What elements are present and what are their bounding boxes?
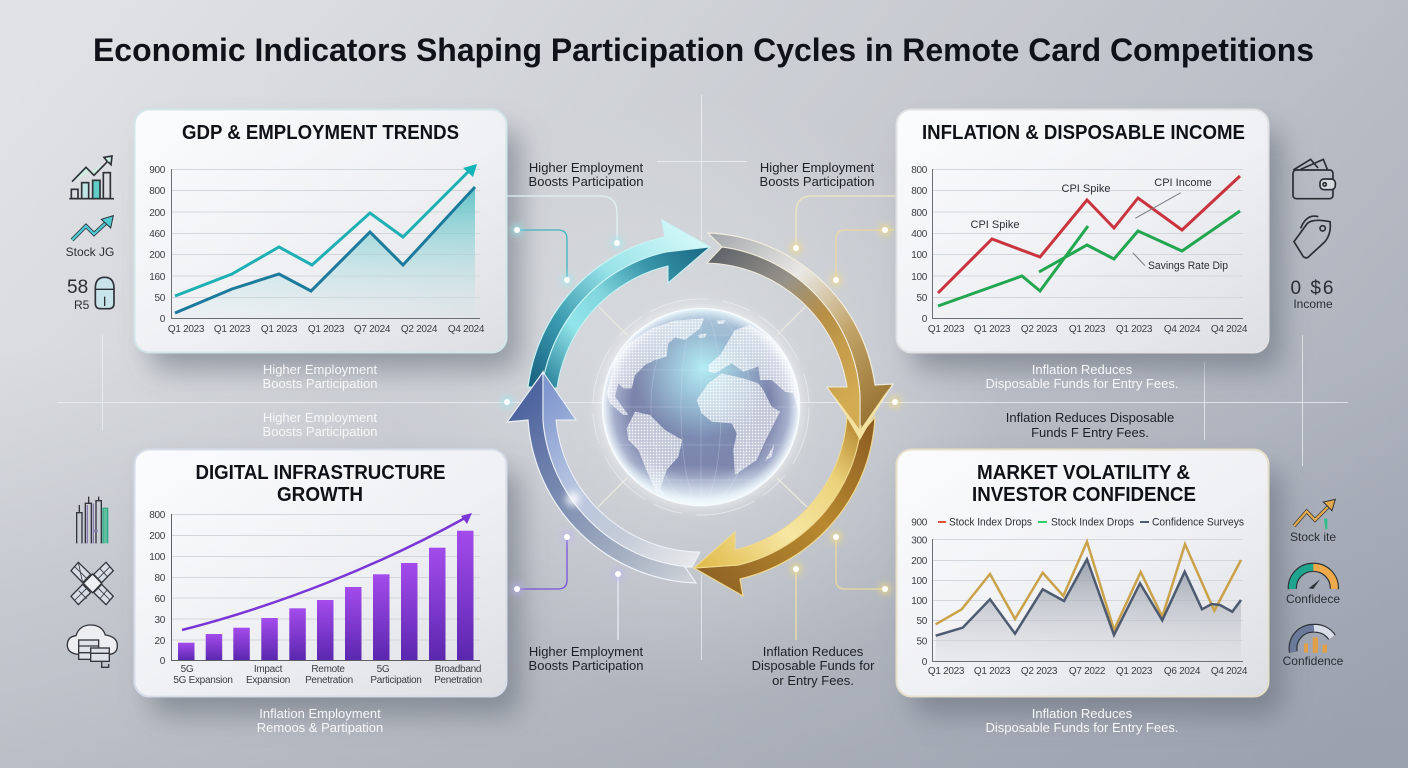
line chart: inflation: Q1 2023	[1069, 324, 1106, 335]
line chart: GDP: 800	[149, 186, 166, 197]
line chart: GDP: 50	[154, 293, 166, 304]
cycle arrow: blue silver	[507, 372, 700, 583]
panel: GDP and employment trends	[134, 110, 506, 352]
line chart: inflation: CPI Spike	[971, 219, 1019, 231]
line chart: market: 50	[916, 636, 928, 648]
line chart: inflation: 100	[911, 272, 928, 283]
line chart: inflation: Q1 2023	[928, 324, 965, 335]
line chart: inflation: 400	[911, 229, 928, 240]
icon: gold stock arrow: Stock ite	[1290, 530, 1336, 544]
icon: price tag	[1294, 216, 1330, 258]
bar chart: digital: Remote	[311, 664, 345, 675]
captions: dark: Boosts Participation	[529, 658, 643, 673]
line chart: GDP: 460	[149, 229, 166, 240]
line chart: GDP: 900	[149, 165, 166, 176]
line chart: inflation: CPI Income	[1154, 177, 1212, 189]
line chart: market: 900	[911, 518, 928, 528]
bar chart: digital: 800	[149, 510, 166, 521]
line chart: market: 0	[922, 657, 928, 668]
icon: growth bars	[69, 156, 114, 199]
captions: dark: Inflation Reduces	[763, 644, 864, 659]
cycle arrow: teal	[528, 220, 710, 388]
icon: confidence gauge	[1286, 567, 1340, 606]
title: Economic Indicators Shaping Participation Cycles in Remote Card Competitions	[93, 32, 1314, 68]
captions: dark: Disposable Funds for	[752, 658, 875, 673]
icon: RF device: R5	[74, 298, 90, 312]
line chart: market	[911, 518, 1248, 677]
line chart: market: 200	[911, 556, 928, 567]
heading: market: INVESTOR CONFIDENCE	[972, 484, 1196, 506]
line chart: market: Q6 2024	[1164, 666, 1201, 677]
bar chart: digital: 80	[154, 573, 166, 584]
line chart: inflation: 100	[911, 250, 928, 261]
captions: dark: Higher Employment	[529, 160, 643, 175]
legend: Confidence Surveys	[1152, 516, 1244, 528]
icon: RF device: 58	[67, 277, 88, 298]
icon: confidence meter: Confidence	[1283, 654, 1344, 668]
panel: market volatility and investor confidence	[896, 450, 1268, 696]
line chart: inflation: Q1 2023	[974, 324, 1011, 335]
line chart: GDP: Q1 2023	[261, 324, 298, 335]
heading: digital: DIGITAL INFRASTRUCTURE	[196, 462, 446, 484]
bar chart: digital: 30	[154, 615, 166, 626]
line chart: inflation: CPI Spike	[1062, 183, 1110, 195]
line chart: GDP: 200	[149, 250, 166, 261]
bar chart: digital: Expansion	[246, 675, 290, 686]
line chart: inflation: Q1 2023	[1116, 324, 1153, 335]
icon: gold stock arrow	[1290, 499, 1336, 544]
captions: dark	[529, 160, 1174, 688]
icon: satellite	[71, 562, 113, 605]
income value	[1291, 278, 1335, 311]
heading: inflation: INFLATION & DISPOSABLE INCOME	[922, 122, 1245, 144]
bar chart: digital: 200	[149, 531, 166, 542]
bar chart: digital: 5G Expansion	[173, 675, 233, 686]
continents	[607, 318, 799, 495]
captions: white under cards: Higher Employment	[263, 410, 377, 425]
captions: white under cards: Disposable Funds for Entry Fees.	[986, 376, 1178, 391]
captions: dark: Funds F Entry Fees.	[1031, 425, 1149, 440]
line chart: GDP: 200	[149, 208, 166, 219]
line chart: market: Q1 2023	[928, 666, 965, 677]
captions: white under cards	[257, 362, 1178, 735]
card shadows	[150, 130, 1282, 715]
line chart: inflation: 800	[911, 165, 928, 176]
bar chart: digital: Impact	[254, 664, 283, 675]
heading: market	[972, 462, 1196, 506]
income value: 0 $6	[1291, 278, 1335, 299]
line chart: market: Q2 2023	[1021, 666, 1058, 677]
line chart: GDP: Q1 2023	[308, 324, 345, 335]
icon: towers	[77, 497, 108, 543]
line chart: market: Q1 2023	[974, 666, 1011, 677]
bar chart: digital: Penetration	[434, 675, 482, 686]
bar chart: digital: 5G	[377, 664, 390, 675]
icon: wallet	[1293, 159, 1335, 199]
panel: inflation and disposable income	[896, 110, 1268, 352]
legend: Stock Index Drops	[949, 516, 1032, 528]
icon: cloud servers	[67, 625, 117, 667]
captions: white under cards: Boosts Participation	[263, 424, 377, 439]
income value: Income	[1293, 297, 1333, 311]
connector dots	[502, 225, 900, 594]
line chart: inflation: Q4 2024	[1164, 324, 1201, 335]
icon: confidence gauge: Confidece	[1286, 592, 1340, 606]
captions: dark: Higher Employment	[760, 160, 874, 175]
legend: Stock Index Drops	[1051, 516, 1134, 528]
heading: digital: GROWTH	[277, 484, 363, 506]
line chart: GDP: Q2 2024	[401, 324, 438, 335]
icon: stock arrow	[66, 216, 114, 259]
bar chart: digital	[149, 510, 482, 686]
bar chart: digital: 5G	[181, 664, 194, 675]
line chart: inflation: Q4 2024	[1211, 324, 1248, 335]
line chart: market: Q7 2022	[1069, 666, 1106, 677]
connector lines	[507, 196, 895, 640]
line chart: GDP: Q7 2024	[354, 324, 391, 335]
line chart: GDP: 160	[149, 272, 166, 283]
line chart: GDP: Q1 2023	[214, 324, 251, 335]
captions: white under cards: Boosts Participation	[263, 376, 377, 391]
heading: digital	[196, 462, 446, 506]
line chart: inflation: 0	[922, 314, 928, 325]
captions: white under cards: Inflation Reduces	[1032, 706, 1133, 721]
line chart: market: Q4 2024	[1211, 666, 1248, 677]
bar chart: digital: Broadband	[435, 664, 481, 675]
line chart: market: 100	[911, 596, 928, 607]
captions: dark: Boosts Participation	[529, 174, 643, 189]
line chart: GDP: Q4 2024	[448, 324, 485, 335]
line chart: GDP: Q1 2023	[168, 324, 205, 335]
captions: dark: Boosts Participation	[760, 174, 874, 189]
captions: dark: or Entry Fees.	[772, 673, 854, 688]
line chart: inflation: 800	[911, 186, 928, 197]
line chart: market: 300	[911, 536, 928, 546]
bar chart: digital: 20	[154, 636, 166, 647]
cycle arrow: silver to gold	[707, 233, 893, 435]
globe	[593, 299, 809, 515]
captions: white under cards: Disposable Funds for Entry Fees.	[986, 720, 1178, 735]
panel: digital infrastructure growth	[134, 450, 506, 696]
icon: confidence meter	[1283, 628, 1344, 668]
line chart: inflation: Savings Rate Dip	[1148, 260, 1228, 272]
line chart: market: 50	[916, 616, 928, 627]
legend	[938, 516, 1244, 528]
cycle arrow: gold	[694, 388, 889, 596]
line chart: market: 100	[911, 576, 928, 587]
captions: white under cards: Higher Employment	[263, 362, 377, 377]
line chart: inflation: 800	[911, 208, 928, 219]
bar chart: digital: 0	[160, 656, 166, 667]
captions: dark: Inflation Reduces Disposable	[1006, 410, 1174, 425]
line chart: inflation: Q2 2023	[1021, 324, 1058, 335]
bar chart: digital: Participation	[370, 675, 422, 686]
line chart: inflation: 50	[916, 293, 928, 304]
line chart: market: Q1 2023	[1116, 666, 1153, 677]
bar chart: digital: 100	[149, 552, 166, 563]
bar chart: digital: 60	[154, 594, 166, 605]
line chart: GDP	[149, 164, 485, 335]
icon: RF device	[67, 277, 114, 312]
line chart: GDP: 0	[160, 314, 166, 325]
heading: GDP: GDP & EMPLOYMENT TRENDS	[182, 122, 459, 144]
captions: white under cards: Inflation Employment	[259, 706, 381, 721]
captions: dark: Higher Employment	[529, 644, 643, 659]
captions: white under cards: Remoos & Partipation	[257, 720, 383, 735]
icon: stock arrow: Stock JG	[66, 245, 114, 259]
line chart: inflation	[911, 165, 1248, 335]
heading: market: MARKET VOLATILITY &	[977, 462, 1190, 484]
bar chart: digital: Penetration	[305, 675, 353, 686]
captions: white under cards: Inflation Reduces	[1032, 362, 1133, 377]
